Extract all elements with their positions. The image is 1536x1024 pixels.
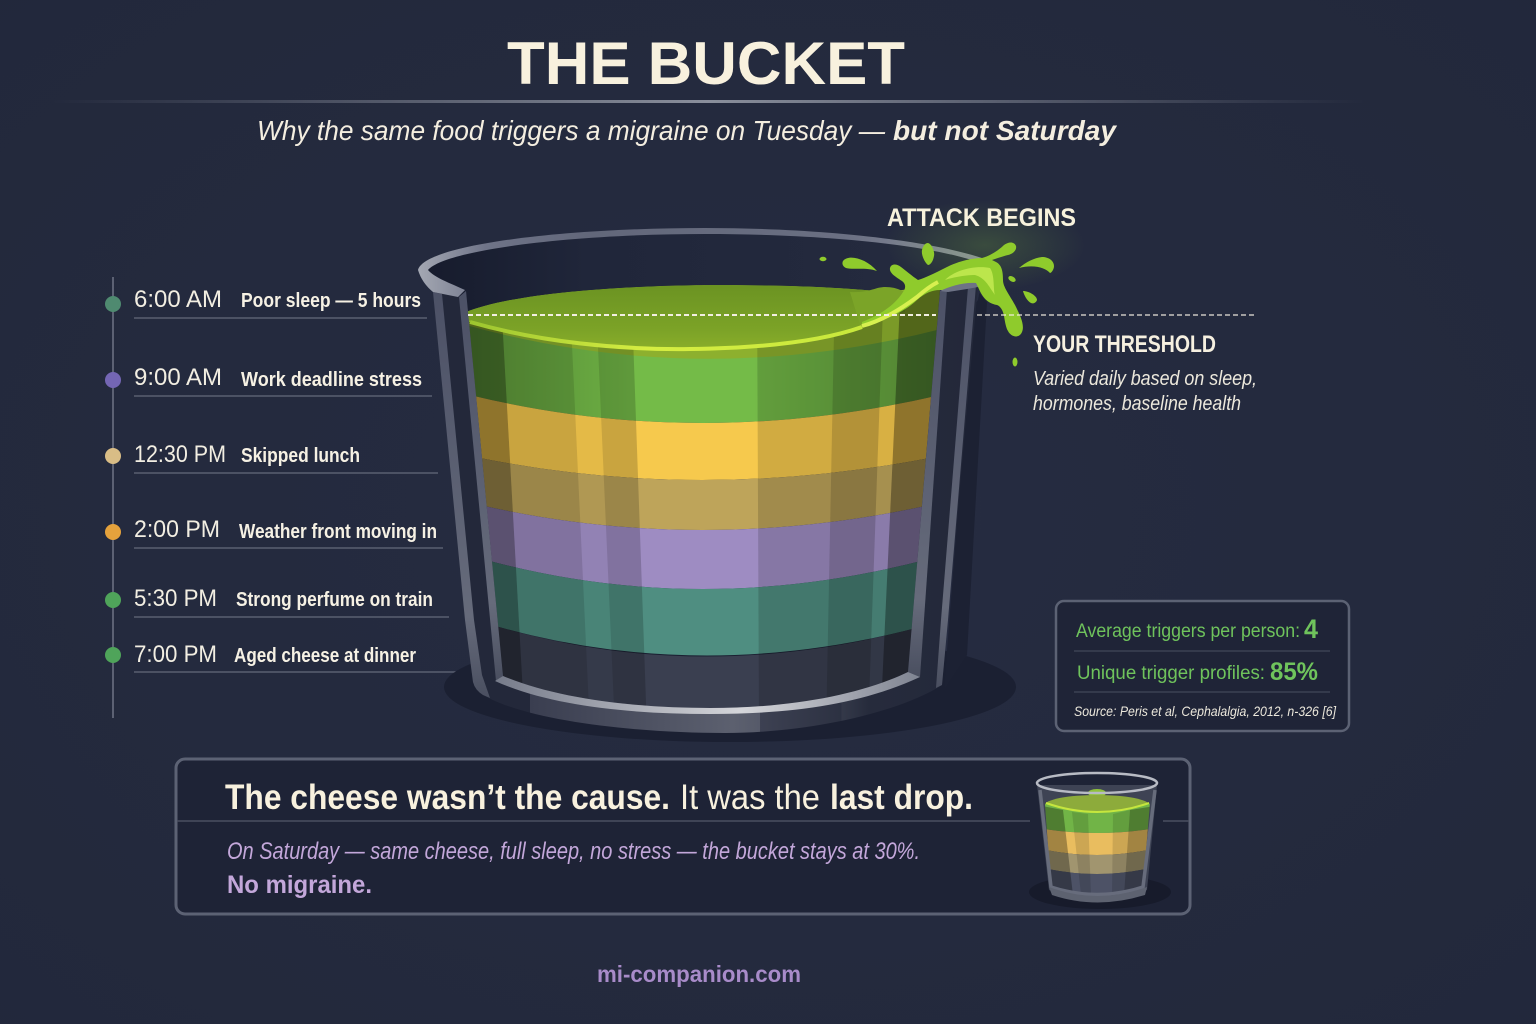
- left wall inner strip: [459, 291, 503, 681]
- right wall outer strip: [936, 285, 976, 688]
- callout headline: It was the: [680, 778, 820, 817]
- base glass lip: [495, 672, 920, 714]
- bucket illustration: [418, 200, 1255, 742]
- timeline of triggers: [105, 277, 456, 718]
- threshold annotation: YOUR THRESHOLD: [1033, 331, 1216, 358]
- threshold annotation: hormones, baseline health: [1033, 393, 1241, 415]
- bucket walls and base: [433, 285, 978, 733]
- bucket interior: [418, 228, 985, 345]
- event: 6:00 AM: 6:00 AM: [134, 286, 222, 313]
- subtitle: but not Saturday: [893, 115, 1117, 146]
- event: 12:30 PM: 12:30 PM: [134, 441, 226, 468]
- event: 9:00 AM: 9:00 AM: [134, 364, 222, 391]
- right wall cap: [940, 283, 978, 292]
- event: 6:00 AM: [105, 286, 421, 313]
- source: Source: Peris et al, Cephalalgia, 2012, n-326 [6]: [1074, 703, 1337, 719]
- stat: unique profiles: 85%: [1270, 658, 1318, 686]
- callout headline: [225, 778, 973, 817]
- bucket rim: [418, 228, 985, 297]
- stat: average triggers: Average triggers per person:: [1076, 621, 1300, 642]
- title: THE BUCKET: [507, 30, 905, 97]
- event: 12:30 PM: Skipped lunch: [241, 445, 360, 467]
- subtitle: Why the same food triggers a migraine on Tuesday —: [257, 115, 886, 146]
- event: 9:00 AM: Work deadline stress: [241, 369, 422, 391]
- stat: average triggers: 4: [1304, 614, 1318, 644]
- event: 2:00 PM: Weather front moving in: [239, 521, 437, 543]
- icon: small bucket: [1029, 773, 1171, 909]
- stat: unique profiles: Unique trigger profiles:: [1077, 663, 1265, 684]
- callout headline: The cheese wasn’t the cause.: [225, 778, 670, 817]
- callout headline: last drop.: [830, 778, 973, 817]
- event: 2:00 PM: 2:00 PM: [134, 516, 220, 543]
- stat: average triggers: [1076, 614, 1318, 644]
- liquid layers: [468, 285, 940, 708]
- glass reflection stripes: [460, 280, 950, 730]
- left wall outer strip: [433, 292, 490, 698]
- footer url: mi-companion.com: [597, 961, 801, 987]
- callout body: On Saturday — same cheese, full sleep, no stress — the bucket stays at 30%.: [227, 838, 920, 865]
- threshold annotation: [1033, 331, 1257, 415]
- threshold annotation: Varied daily based on sleep,: [1033, 368, 1257, 390]
- event: 5:30 PM: [105, 585, 433, 612]
- icon: overflow splash: [820, 242, 1054, 366]
- event: 7:00 PM: Aged cheese at dinner: [234, 645, 416, 667]
- right wall inner strip: [908, 289, 947, 677]
- liquid surface highlight: [470, 322, 862, 349]
- label: attack begins: ATTACK BEGINS: [887, 204, 1076, 232]
- event: 12:30 PM: [105, 441, 360, 468]
- event: 5:30 PM: Strong perfume on train: [236, 589, 433, 611]
- stat: unique profiles: [1077, 658, 1318, 686]
- event: 9:00 AM: [105, 364, 422, 391]
- event: 6:00 AM: Poor sleep — 5 hours: [241, 290, 421, 312]
- event: 5:30 PM: 5:30 PM: [134, 585, 217, 612]
- callout conclusion: No migraine.: [227, 871, 372, 899]
- event: 2:00 PM: [105, 516, 437, 543]
- event: 7:00 PM: [105, 641, 416, 668]
- panel: statistics: [1056, 601, 1349, 731]
- event: 7:00 PM: 7:00 PM: [134, 641, 217, 668]
- glow behind splash: [885, 200, 1085, 290]
- panel: callout: [176, 759, 1190, 914]
- threshold dashed line: [468, 314, 1255, 316]
